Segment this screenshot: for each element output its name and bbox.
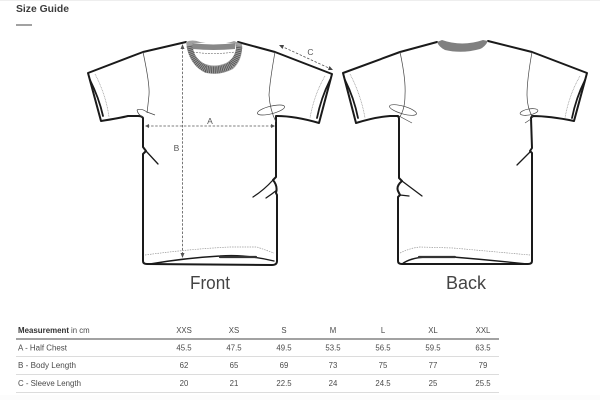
size table [16, 326, 499, 393]
row A: half chest: 47.5 [226, 344, 242, 352]
row A: half chest [18, 344, 491, 352]
row C: sleeve length: 25 [429, 379, 438, 388]
back collar [437, 40, 488, 52]
back t-shirt diagram [343, 40, 587, 264]
row C: sleeve length: 20 [180, 379, 189, 388]
back shirt thin seams [350, 52, 580, 255]
table header row: XXL [476, 326, 491, 335]
row A: half chest: 56.5 [375, 344, 391, 352]
row C: sleeve length: 25.5 [475, 379, 491, 388]
measurement B: body length [174, 44, 184, 258]
row B: body length: B - Body Length [18, 361, 76, 370]
label: Front: Front [190, 273, 230, 293]
row C: sleeve length: 21 [230, 379, 238, 388]
back shirt outline [343, 41, 587, 264]
table header row: L [381, 326, 386, 335]
table header row: S [281, 326, 287, 335]
front shirt outline [88, 42, 332, 265]
table header row: in cm [71, 326, 90, 335]
measurement B: body length: B [174, 143, 180, 153]
row A: half chest: 53.5 [325, 344, 341, 352]
table header row: XS [229, 326, 239, 335]
row B: body length: 65 [230, 361, 239, 370]
row B: body length [18, 361, 487, 370]
front t-shirt diagram [88, 40, 333, 265]
title: Size Guide: Size Guide [16, 4, 69, 15]
row C: sleeve length: 24 [329, 379, 338, 388]
row B: body length: 75 [379, 361, 388, 370]
title: Size Guide [16, 4, 69, 26]
table header row [18, 326, 491, 335]
row C: sleeve length: 24.5 [375, 379, 391, 388]
row B: body length: 62 [180, 361, 188, 370]
label: Back: Back [446, 273, 487, 293]
row A: half chest: A - Half Chest [18, 344, 68, 352]
table header row: XL [428, 326, 438, 335]
row B: body length: 79 [479, 361, 487, 370]
table header row: M [330, 326, 336, 335]
measurement A: half chest: A [207, 116, 213, 126]
measurement C: sleeve length [279, 45, 333, 70]
row B: body length: 69 [280, 361, 288, 370]
measurement C: sleeve length: C [307, 47, 314, 57]
row B: body length: 73 [329, 361, 337, 370]
row B: body length: 77 [429, 361, 437, 370]
front collar [186, 40, 242, 74]
table header row: XXS [176, 326, 192, 335]
row C: sleeve length: 22.5 [276, 379, 292, 388]
row C: sleeve length: C - Sleeve Length [18, 379, 81, 388]
row A: half chest: 49.5 [276, 344, 292, 352]
row A: half chest: 63.5 [475, 344, 491, 352]
row C: sleeve length [18, 379, 491, 388]
measurement A: half chest [145, 116, 275, 128]
front shirt thin seams [95, 52, 325, 255]
row A: half chest: 45.5 [176, 344, 192, 352]
row A: half chest: 59.5 [425, 344, 441, 352]
table header row: Measurement [18, 326, 69, 335]
